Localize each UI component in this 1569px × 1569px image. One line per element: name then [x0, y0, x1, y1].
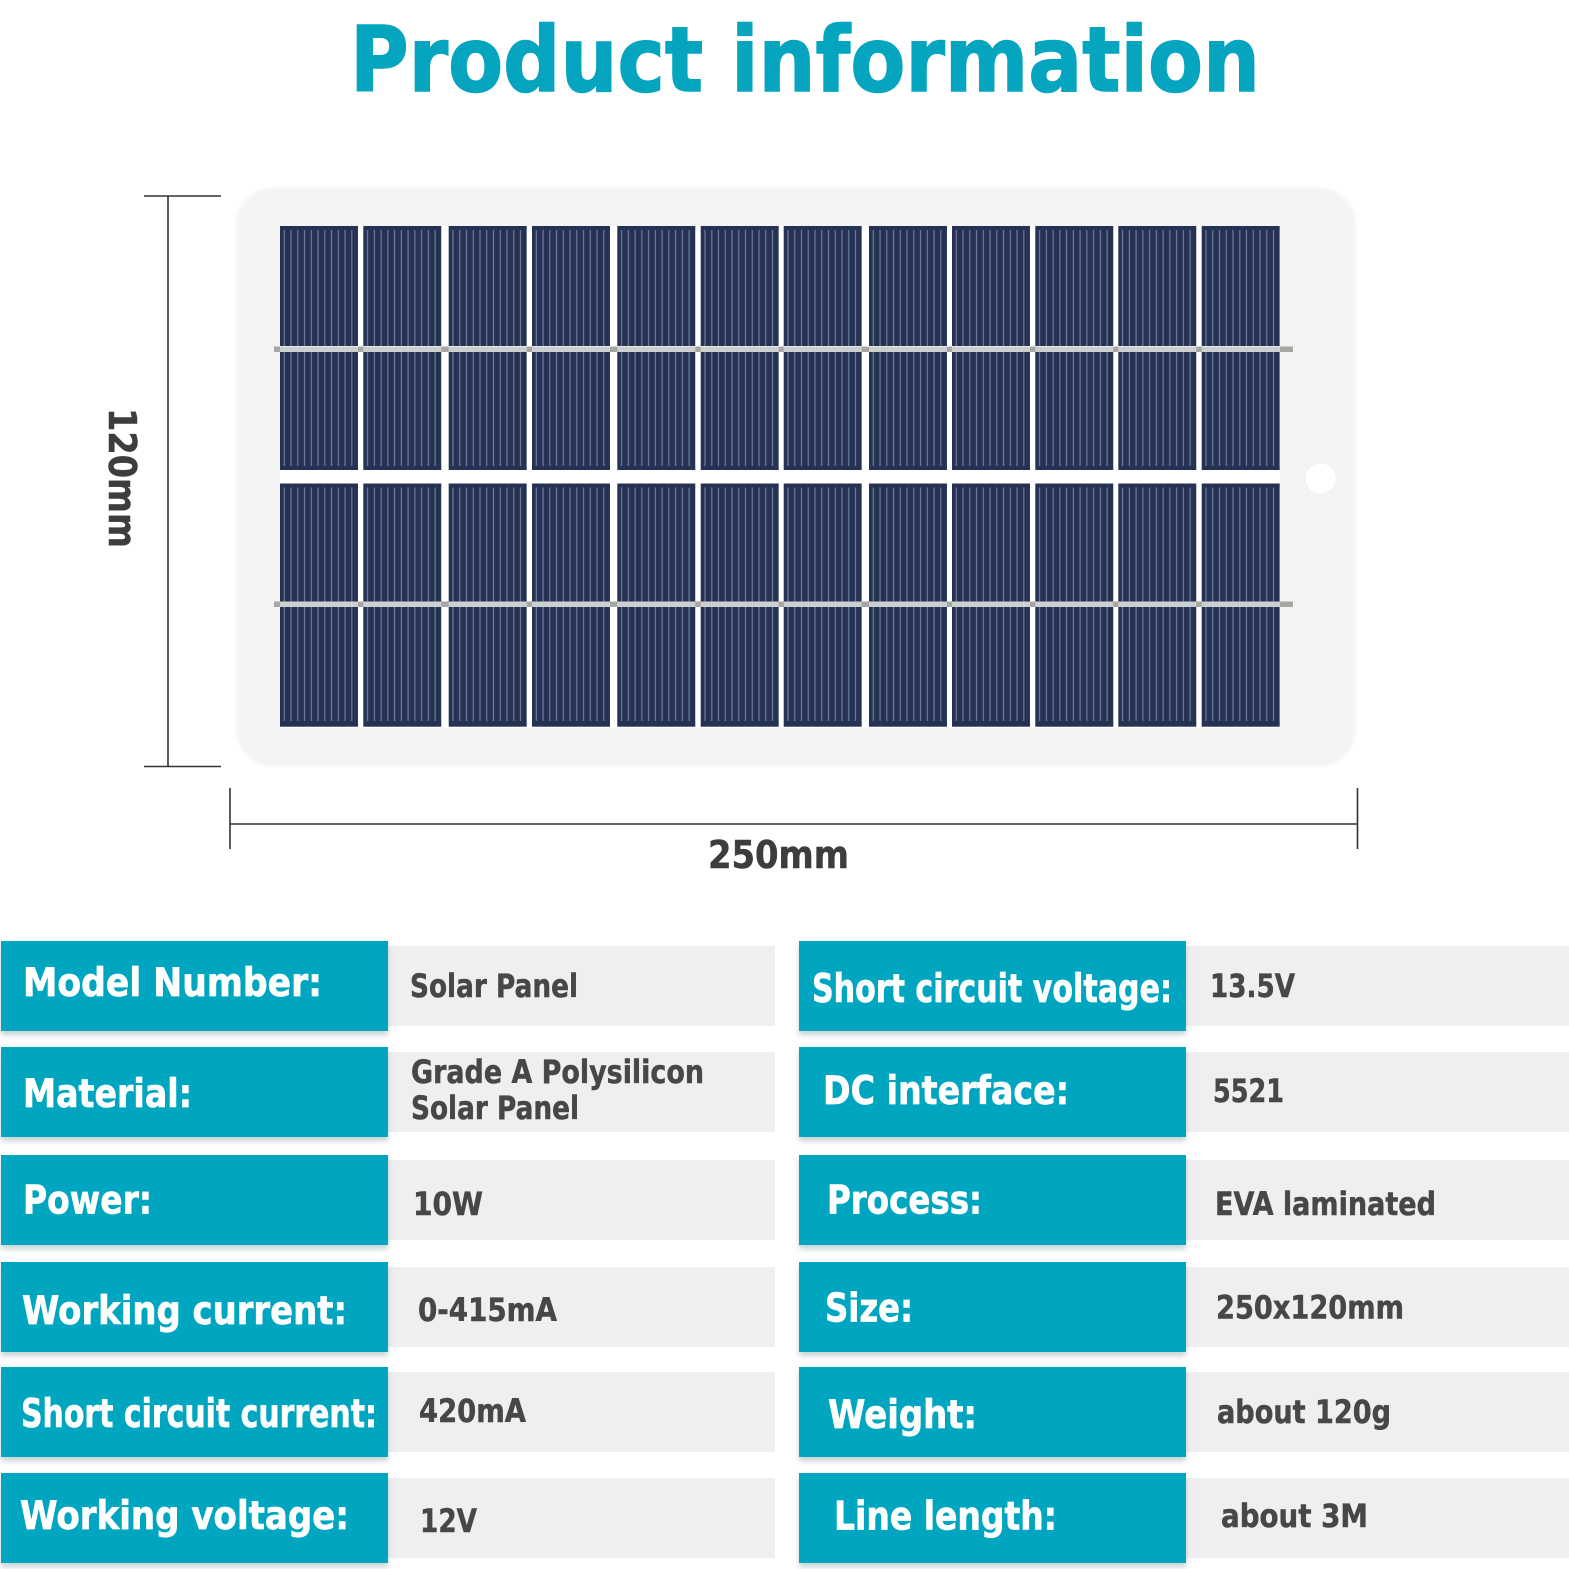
row: short circuit current: Short circuit current:: [21, 1392, 377, 1437]
row: model number: [1, 941, 775, 1031]
row: size: Size:: [825, 1286, 913, 1332]
row: short circuit voltage: [799, 941, 1569, 1031]
dimension: width 250mm: [230, 788, 1358, 877]
row: working current: [1, 1262, 775, 1352]
row: weight: Weight:: [828, 1393, 977, 1438]
row: working voltage: [1, 1473, 775, 1563]
height label: 120mm: [100, 408, 144, 548]
spec table: right column: [799, 941, 1569, 1563]
row: line length: about 3M: [1221, 1497, 1368, 1535]
title: Product information: [350, 8, 1260, 113]
row: material: Material:: [23, 1072, 192, 1117]
row: material: Solar Panel: [411, 1089, 579, 1127]
row: weight: about 120g: [1217, 1393, 1391, 1431]
mounting hole: [1306, 464, 1336, 494]
row: process: EVA laminated: [1215, 1185, 1436, 1223]
spec table: left column: [1, 941, 775, 1563]
row: size: [799, 1262, 1569, 1352]
row: dc interface: 5521: [1213, 1072, 1284, 1110]
row: power: 10W: [413, 1185, 483, 1223]
row: dc interface: [799, 1047, 1569, 1137]
width label: 250mm: [708, 833, 849, 877]
row: short circuit voltage: 13.5V: [1210, 967, 1295, 1005]
row: short circuit voltage: Short circuit voltage:: [812, 967, 1172, 1012]
solar panel illustration: [237, 188, 1355, 766]
row: material: [1, 1047, 775, 1137]
bus bar upper: [274, 346, 1293, 352]
row: weight: [799, 1367, 1569, 1457]
row: short circuit current: 420mA: [419, 1392, 526, 1430]
row: line length: Line length:: [834, 1494, 1057, 1540]
bus bar lower: [274, 602, 1293, 607]
row: working voltage: Working voltage:: [20, 1494, 349, 1539]
row: material: Grade A Polysilicon: [411, 1053, 704, 1091]
row: model number: Model Number:: [23, 961, 322, 1006]
solar cells: [280, 226, 1280, 727]
row: line length: [799, 1473, 1569, 1563]
row: power: Power:: [23, 1178, 152, 1224]
row: power: [1, 1155, 775, 1245]
row: working current: 0-415mA: [418, 1291, 557, 1329]
row: working current: Working current:: [22, 1289, 347, 1334]
dimension: height 120mm: [100, 196, 221, 766]
row: size: 250x120mm: [1216, 1288, 1404, 1326]
row: working voltage: 12V: [420, 1502, 477, 1540]
panel: backing sheet: [237, 188, 1355, 766]
row: process: Process:: [827, 1178, 982, 1224]
row: dc interface: DC interface:: [823, 1069, 1069, 1114]
row: process: [799, 1155, 1569, 1245]
cell grid gaps: [280, 226, 1280, 728]
row: short circuit current: [1, 1367, 775, 1457]
row: model number: Solar Panel: [410, 967, 578, 1005]
